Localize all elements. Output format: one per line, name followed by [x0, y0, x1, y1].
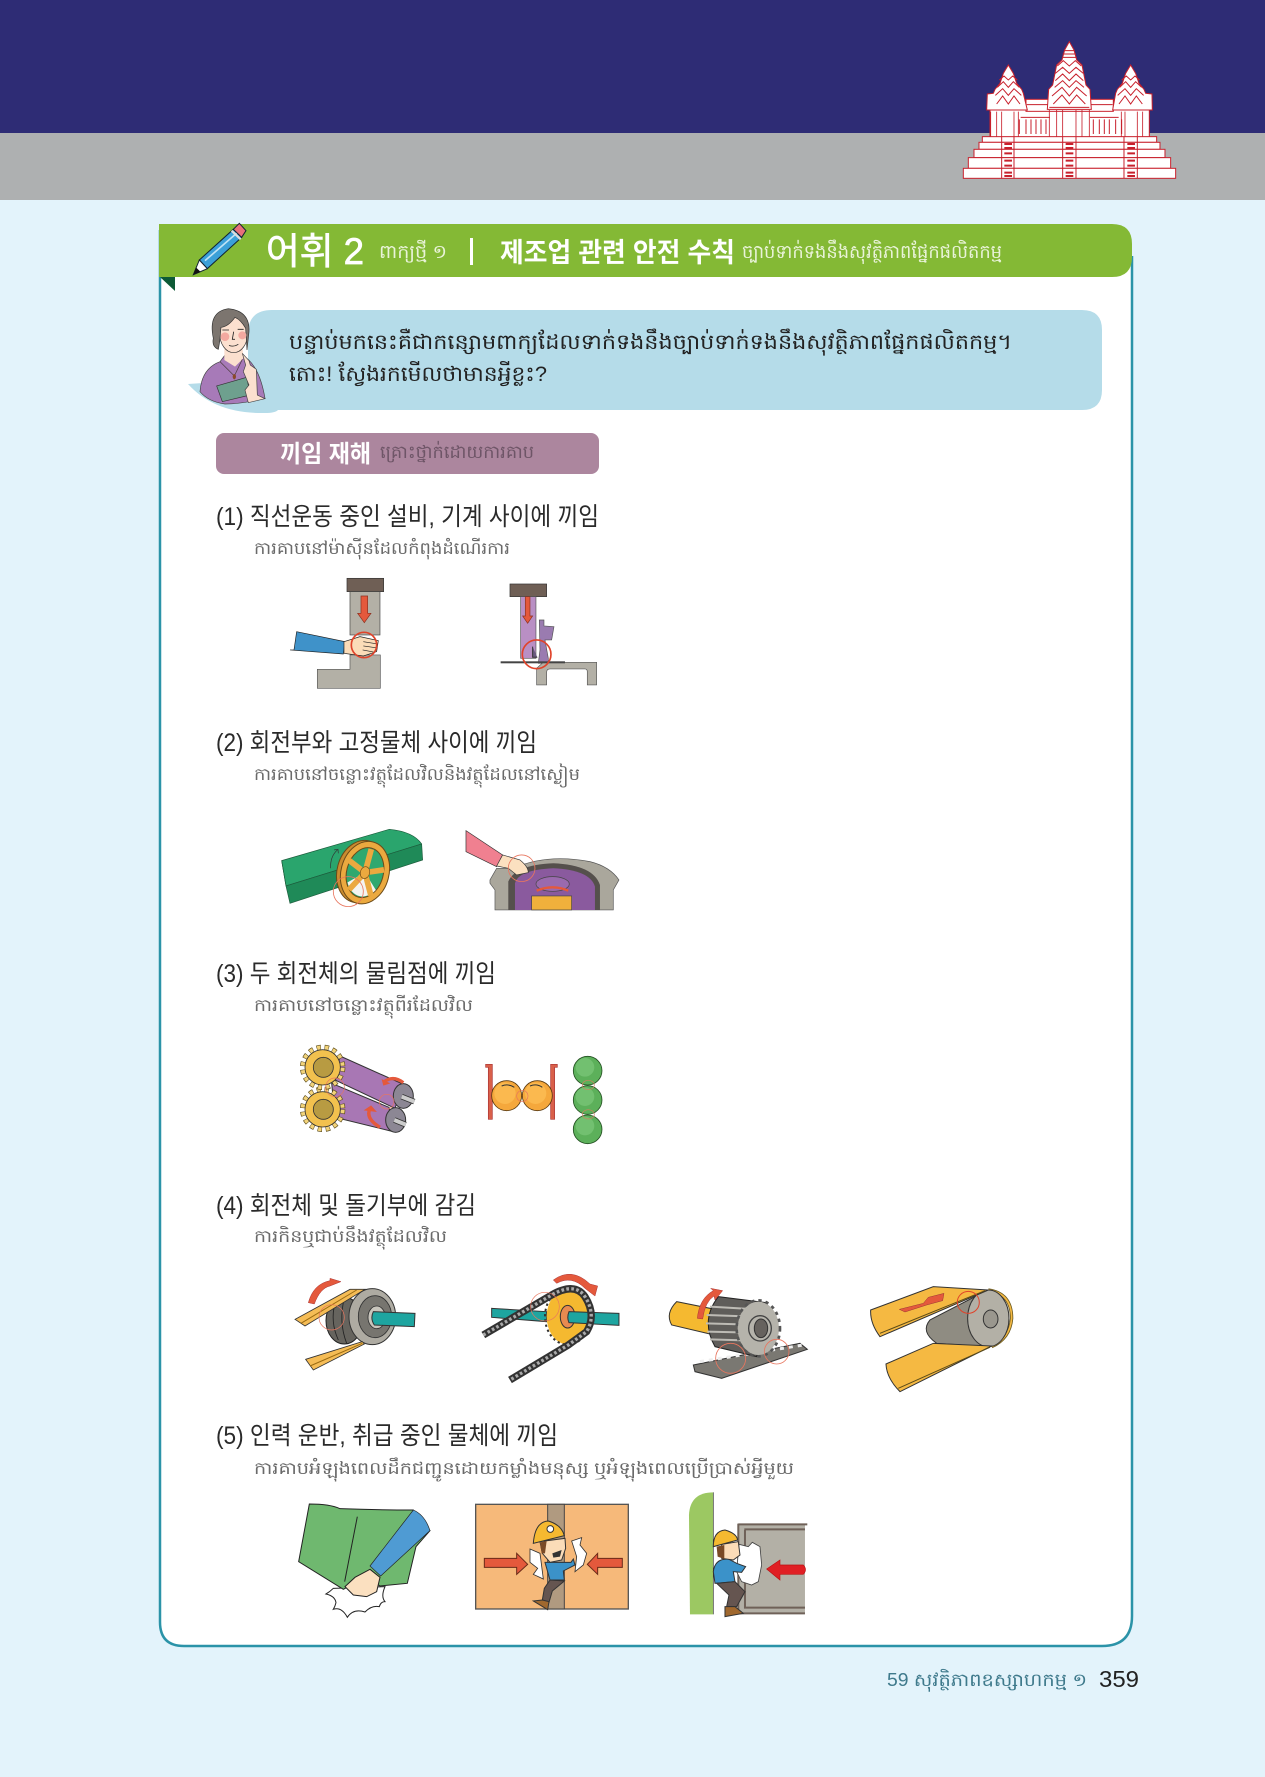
heading 1: (1) 직선운동 중인 설비, 기계 사이에 끼임 [216, 503, 599, 531]
icon: teacher [200, 309, 265, 404]
speech bubble [188, 309, 1102, 413]
illustration: gear rollers [303, 1047, 414, 1132]
vocabulary number: 어휘 2 [266, 231, 364, 272]
illustration: hand under load [299, 1504, 430, 1617]
footer chapter label: 59 សុវត្ថិភាពឧស្សាហកម្ម ១ [887, 1668, 1087, 1692]
fold corner [160, 277, 175, 291]
illustration: hand on rotating housing [466, 831, 619, 910]
title Khmer: ច្បាប់ទាក់ទងនឹងសុវត្ថិភាពផ្នែកផលិតកម្ម [742, 239, 1002, 265]
illustration: worker against wall [689, 1492, 807, 1617]
illustration: belt pulley [295, 1278, 415, 1370]
heading 5: (5) 인력 운반, 취급 중인 물체에 끼임 [216, 1422, 558, 1450]
vocabulary label: ពាក្យថ្មី ១ [379, 239, 447, 263]
caption 3: ការគាបនៅចន្លោះវត្ថុពីរដែលវិល [254, 994, 473, 1019]
heading 2: (2) 회전부와 고정물체 사이에 끼임 [216, 729, 537, 757]
bubble text line 1: បន្ទាប់មកនេះគឺជាកន្សោមពាក្យដែលទាក់ទងនឹងច្បាប់ទាក់ទងនឹងសុវត្ថិភាពផ្នែកផលិតកម្ម។ [289, 328, 1012, 356]
panel: content card [160, 230, 1132, 1646]
caption 2: ការគាបនៅចន្លោះវត្ថុដែលវិលនិងវត្ថុដែលនៅស្ងៀម [254, 763, 580, 788]
heading 4: (4) 회전체 및 돌기부에 감김 [216, 1192, 476, 1220]
illustration: cutting press [501, 584, 597, 685]
caption 1: ការគាបនៅម៉ាស៊ីនដែលកំពុងដំណើរការ [254, 537, 510, 560]
header band [0, 0, 1265, 200]
section label bar [216, 433, 599, 474]
illustration: hand in press [290, 578, 384, 688]
page number: 359 [1099, 1666, 1139, 1692]
illustration: meshing rollers [486, 1056, 602, 1144]
divider bar [470, 238, 473, 265]
illustration: chain sprocket [483, 1274, 619, 1380]
illustration: rack and gear [669, 1288, 807, 1378]
icon: pencil [193, 223, 246, 275]
caption 5: ការគាបអំឡុងពេលដឹកជញ្ជូនដោយកម្លាំងមនុស្ស ឬអំឡុងពេលប្រើប្រាស់អ្វីមួយ [254, 1457, 794, 1482]
title banner [159, 223, 1132, 291]
section label Khmer: គ្រោះថ្នាក់ដោយការគាប [380, 440, 534, 463]
title: 제조업 관련 안전 수칙 [500, 238, 735, 268]
illustration: worker between walls [476, 1504, 628, 1610]
illustration: flat belt [871, 1287, 1012, 1392]
bubble text line 2: តោះ! ស្វែងរកមើលថាមានអ្វីខ្លះ? [289, 361, 547, 387]
illustration: wheel on belt [282, 829, 423, 909]
section label Korean: 끼임 재해 [280, 441, 371, 468]
heading 3: (3) 두 회전체의 물림점에 끼임 [216, 960, 496, 988]
caption 4: ការកិនឬជាប់នឹងវត្ថុដែលវិល [254, 1225, 447, 1250]
icon: Angkor Wat temple [963, 42, 1176, 178]
